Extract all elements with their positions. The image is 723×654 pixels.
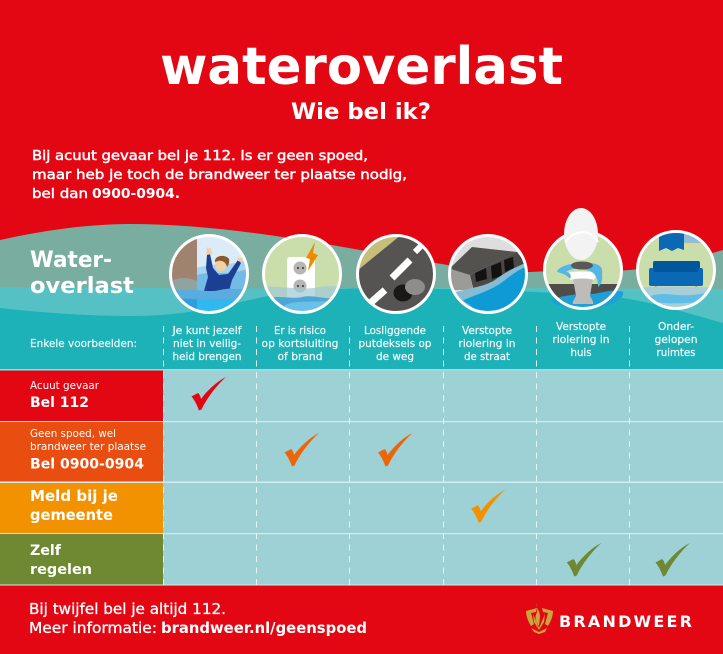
row: meld bij gemeente: gemeente — [30, 507, 113, 524]
row: zelf regelen: regelen — [30, 562, 92, 578]
row: acuut gevaar — [0, 370, 163, 421]
column labels: niet in veilig- — [173, 337, 241, 350]
check: green 2 — [656, 543, 690, 576]
table grid — [0, 369, 723, 586]
column labels: heid brengen — [172, 350, 242, 363]
title: wateroverlast — [160, 37, 563, 97]
intro text: maar heb je toch de brandweer ter plaatse nodig, — [32, 168, 407, 183]
icon: toilet overflowing — [544, 208, 623, 314]
column labels: Losliggende — [364, 324, 426, 337]
icon: road with loose manhole — [359, 237, 433, 311]
row: meld bij gemeente — [0, 483, 163, 533]
row: geen spoed: brandweer ter plaatse — [30, 441, 146, 453]
intro text: Bij acuut gevaar bel je 112. Is er geen spoed, — [32, 149, 368, 164]
column labels: of brand — [278, 350, 322, 363]
column labels: putdeksels op — [358, 337, 432, 350]
logo: brandweer — [526, 602, 692, 634]
footer text: Meer informatie: — [29, 620, 157, 637]
footer text: brandweer.nl/geenspoed — [161, 619, 367, 637]
column labels: Verstopte — [462, 324, 512, 337]
heading: Wateroverlast: overlast — [30, 273, 134, 299]
check: orange 1 — [284, 433, 319, 466]
heading: Wateroverlast — [30, 247, 134, 299]
intro text: 0900-0904. — [92, 187, 180, 202]
row: acuut gevaar: Acuut gevaar — [30, 380, 100, 392]
icon: blocked street drain — [451, 237, 525, 311]
heading: Wateroverlast: Water- — [30, 247, 112, 273]
icon: person in water — [172, 237, 246, 311]
footer text — [29, 601, 367, 637]
row: zelf regelen: Zelf — [30, 543, 62, 559]
icon: flooded living room — [639, 233, 713, 307]
column labels: gelopen — [654, 333, 698, 346]
column labels: Verstopte — [556, 320, 606, 333]
water waves background — [0, 224, 723, 370]
row: zelf regelen — [0, 534, 163, 584]
icon: socket with lightning — [265, 237, 339, 311]
column labels: riolering in — [552, 333, 610, 346]
column labels — [172, 320, 698, 363]
row: geen spoed: Geen spoed, wel — [30, 428, 116, 440]
column labels: ruimtes — [656, 346, 696, 359]
row: meld bij gemeente: Meld bij je — [30, 488, 118, 505]
logo: brandweer: BRANDWEER — [559, 612, 692, 631]
subtitle: Wie bel ik? — [291, 99, 431, 125]
check: green 1 — [567, 543, 601, 576]
check: red — [192, 377, 226, 410]
label: enkele voorbeelden: Enkele voorbeelden: — [30, 338, 137, 350]
row: acuut gevaar: Bel 112 — [30, 395, 89, 411]
check: orange 2 — [378, 433, 412, 466]
footer text: Bij twijfel bel je altijd 112. — [29, 601, 226, 618]
column labels: op kortsluiting — [262, 337, 338, 350]
column labels: huis — [570, 346, 592, 359]
column labels: de straat — [464, 350, 510, 363]
column labels: de weg — [376, 350, 414, 363]
column labels: Je kunt jezelf — [172, 324, 242, 337]
row: geen spoed — [0, 422, 163, 482]
column labels: Onder- — [658, 320, 694, 333]
column labels: Er is risico — [274, 324, 326, 337]
intro text: bel dan — [32, 187, 88, 202]
row: geen spoed: Bel 0900-0904 — [30, 456, 144, 472]
intro text — [32, 149, 407, 202]
column labels: riolering in — [458, 337, 516, 350]
check: amber — [471, 489, 506, 523]
